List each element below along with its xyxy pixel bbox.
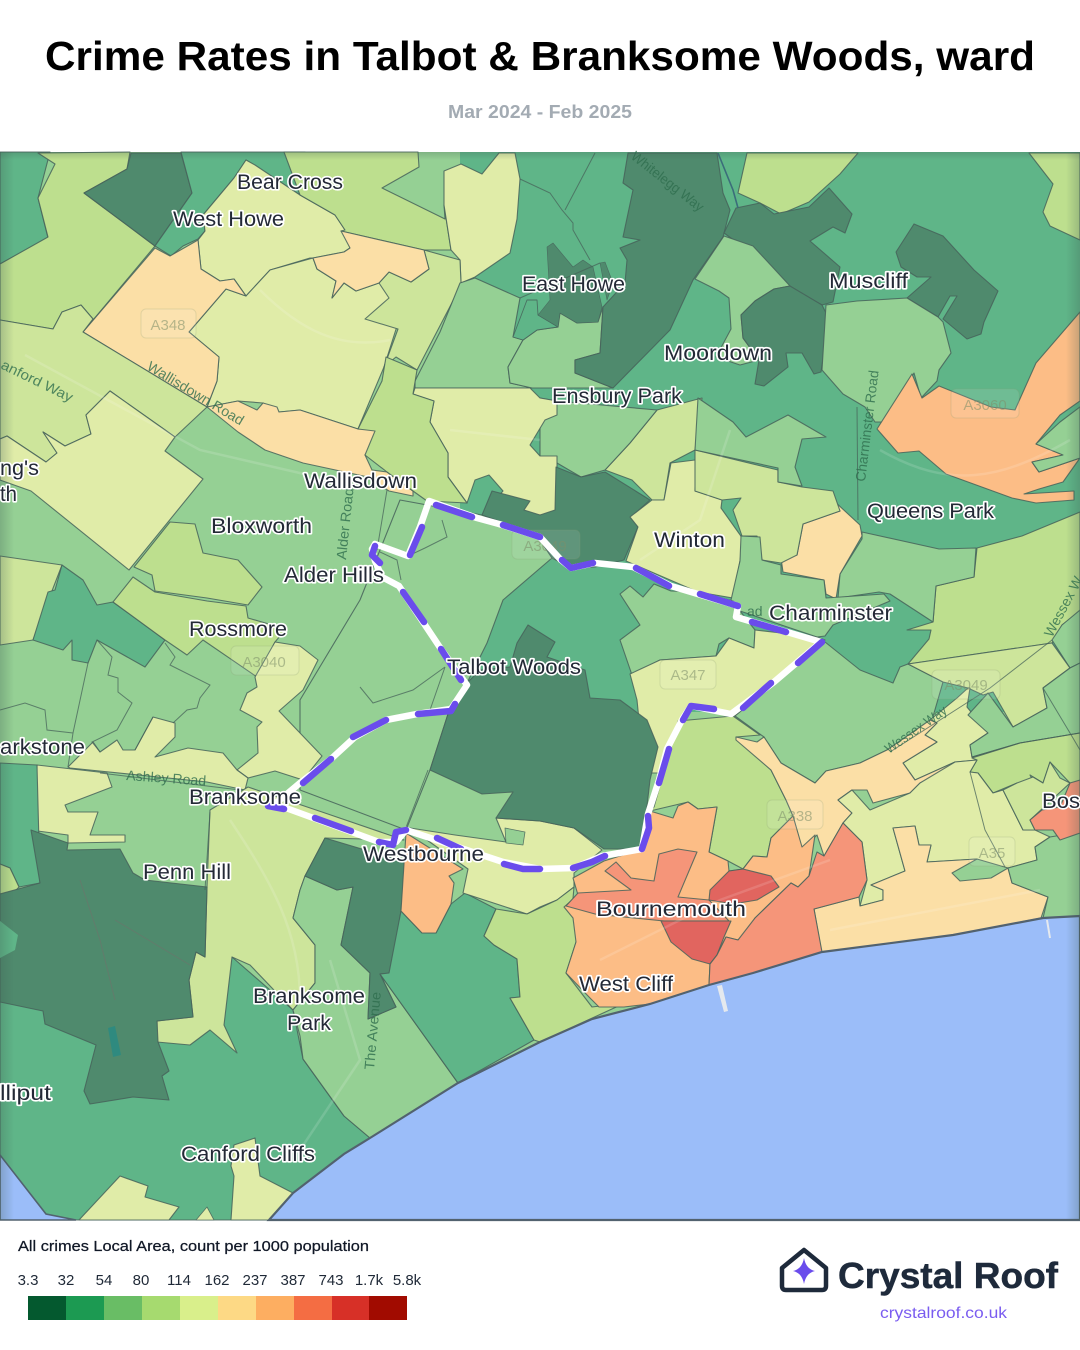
place name labels: Canford Cliffs — [181, 1143, 315, 1166]
subtitle: date range: Mar 2024 - Feb 2025 — [448, 102, 632, 122]
place name labels: West Cliff — [579, 973, 673, 996]
place name labels: Bournemouth — [596, 898, 746, 921]
icon: house with star — [782, 1250, 826, 1290]
road name labels — [0, 148, 1080, 1070]
place name labels: Bos — [1042, 790, 1080, 813]
place name labels: Bear Cross — [237, 171, 343, 194]
place name labels: Penn Hill — [143, 861, 231, 884]
road name labels: Ashley Road — [126, 767, 207, 789]
place name labels: Queens Park — [867, 500, 995, 523]
place name labels: West Howe — [173, 208, 284, 231]
place name labels: Branksome — [189, 786, 301, 809]
place name labels: Moordown — [664, 342, 772, 365]
title: Crime Rates in Talbot & Branksome Woods, ward — [45, 33, 1035, 79]
road name labels: Alder Road — [333, 487, 357, 560]
place name labels: Muscliff — [829, 270, 908, 293]
road shields: A3049 — [523, 538, 567, 555]
map panel — [0, 148, 1080, 1220]
roads and thin road lines — [0, 153, 1080, 1150]
place name labels: Rossmore — [189, 618, 287, 641]
place name labels: Winton — [654, 529, 725, 552]
road name labels: ad — [747, 603, 763, 619]
place name labels: Talbot Woods — [447, 656, 581, 679]
road shields: A35 — [979, 845, 1005, 862]
road name labels: anford Way — [0, 356, 76, 405]
legend tick values: 32 — [58, 1272, 74, 1289]
place name labels: Ensbury Park — [552, 385, 683, 408]
logo wordmark: Crystal Roof — [838, 1255, 1059, 1296]
place name labels: Branksome — [253, 985, 365, 1008]
legend tick values: 387 — [280, 1272, 306, 1289]
place name labels: Wallisdown — [304, 470, 417, 493]
road shields: A3049 — [944, 677, 988, 694]
place name labels: lliput — [0, 1082, 51, 1105]
place name labels: arkstone — [0, 736, 85, 759]
legend tick values — [18, 1272, 422, 1289]
sea and coastline — [0, 916, 1080, 1220]
road shields: A348 — [150, 317, 186, 334]
legend tick values: 237 — [242, 1272, 268, 1289]
road shields: A347 — [670, 667, 706, 684]
legend tick values: 3.3 — [18, 1272, 38, 1289]
ward boundary: Talbot & Branksome Woods — [268, 501, 822, 869]
legend tick values: 80 — [133, 1272, 149, 1289]
legend tick values: 54 — [96, 1272, 112, 1289]
road name labels: Charminster Road — [852, 369, 882, 482]
road name labels: The Avenue — [361, 991, 384, 1070]
legend tick values: 114 — [167, 1272, 191, 1289]
place name labels: ng's — [0, 457, 39, 480]
river — [718, 153, 738, 208]
place name labels: Charminster — [769, 602, 892, 625]
road shields: A3040 — [242, 654, 286, 671]
choropleth: crime-rate neighbourhood areas — [0, 152, 1080, 1220]
road shields: A3060 — [963, 397, 1007, 414]
logo: Crystal Roof — [782, 1250, 1059, 1322]
legend tick values: 5.8k — [393, 1272, 422, 1289]
road name labels: Whitelegg Way — [628, 148, 707, 215]
road name labels: Wallisdown Road — [144, 358, 247, 428]
place name labels: Westbourne — [363, 843, 484, 866]
legend title: All crimes Local Area, count per 1000 population — [18, 1238, 369, 1255]
road name labels: Wessex Way — [882, 702, 950, 756]
place name labels: Bloxworth — [211, 515, 312, 538]
place name labels — [0, 171, 1080, 1166]
place name labels: Alder Hills — [284, 564, 384, 587]
legend tick values: 162 — [204, 1272, 230, 1289]
place name labels: th — [0, 483, 17, 506]
road shields — [141, 309, 1019, 866]
place name labels: Park — [287, 1012, 332, 1035]
legend tick values: 743 — [318, 1272, 344, 1289]
legend tick values: 1.7k — [355, 1272, 384, 1289]
legend — [18, 1238, 422, 1320]
road shields: A338 — [777, 808, 813, 825]
legend colour scale — [28, 1296, 407, 1320]
place name labels: East Howe — [522, 273, 625, 296]
logo url: crystalroof.co.uk — [880, 1305, 1008, 1322]
